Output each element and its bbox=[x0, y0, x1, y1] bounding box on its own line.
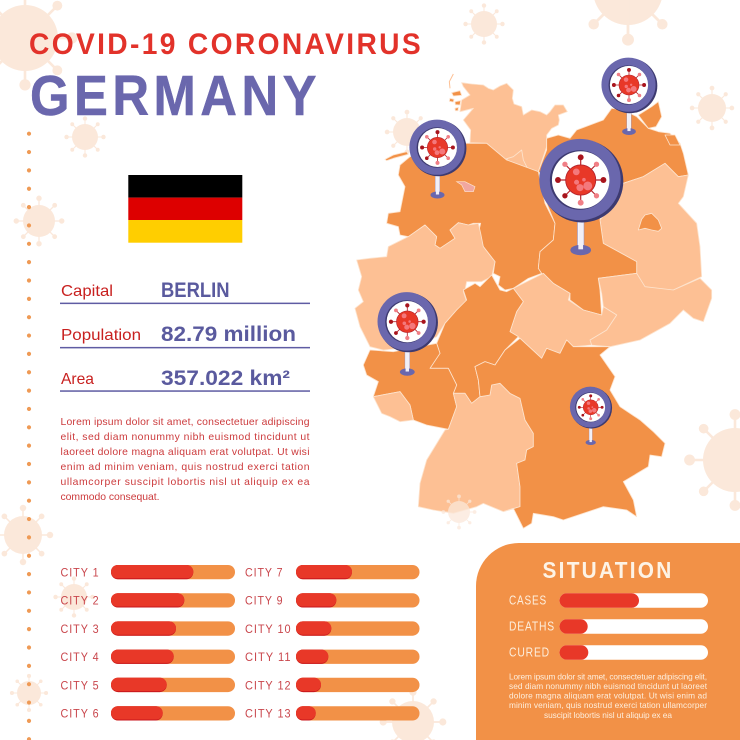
bar: City 13 bbox=[245, 706, 420, 721]
state: Schleswig-Holstein bbox=[460, 83, 567, 172]
text block: situation description: minim veniam, quis nostrud exerci tation ullamcorper bbox=[509, 700, 707, 710]
bar: City 12 bbox=[245, 678, 420, 692]
bar: City 1: CITY 1 bbox=[60, 568, 100, 580]
state: Rhineland-Palatinate bbox=[363, 343, 457, 429]
map pin: south-east bbox=[570, 387, 612, 445]
bar: City 3 bbox=[60, 621, 235, 636]
fact: capital bbox=[60, 279, 310, 304]
bar: City 12: CITY 12 bbox=[245, 680, 292, 692]
state: Brandenburg bbox=[600, 163, 702, 290]
state: Berlin bbox=[638, 213, 662, 231]
bar: City 3: CITY 3 bbox=[60, 624, 100, 636]
island outline: Sylt bbox=[449, 74, 453, 88]
bar: City 13: CITY 13 bbox=[245, 709, 292, 721]
bar: City 5: CITY 5 bbox=[60, 680, 100, 692]
state: Bremen bbox=[457, 182, 475, 192]
text block: description: Lorem ipsum dolor sit amet, consectetuer adipiscing bbox=[60, 417, 310, 428]
bar: City 2: CITY 2 bbox=[60, 596, 100, 608]
title: COVID-19 CORONAVIRUS: COVID-19 CORONAVIRUS bbox=[29, 28, 423, 61]
text block: description: ullamcorper suscipit lobortis nisl ut aliquip ex ea bbox=[60, 477, 310, 488]
islands: Ruegen and Usedom bbox=[638, 102, 680, 145]
state: Baden-Wuerttemberg bbox=[418, 383, 533, 513]
text block: description: commodo consequat. bbox=[60, 492, 160, 503]
text block: description: elit, sed diam nonummy nibh euismod tincidunt ut bbox=[60, 432, 310, 443]
state: Bavaria bbox=[475, 338, 665, 528]
bar: City 4: CITY 4 bbox=[60, 652, 100, 664]
text block: situation description: suscipit lobortis nisl ut aliquip ex ea bbox=[544, 710, 672, 720]
bar: deaths bbox=[509, 619, 708, 634]
fact: area: Area bbox=[61, 371, 94, 388]
map pin: north-east bbox=[601, 58, 657, 135]
heading: GERMANY: GERMANY bbox=[30, 64, 321, 128]
icon: German flag bbox=[128, 175, 242, 243]
state: Saxony bbox=[590, 273, 712, 347]
fact: population bbox=[60, 323, 310, 348]
heading: SITUATION: SITUATION bbox=[542, 557, 674, 583]
bar: City 4 bbox=[60, 650, 235, 664]
bar: City 11: CITY 11 bbox=[245, 652, 292, 664]
state: North Rhine-Westphalia bbox=[355, 223, 495, 350]
fact: population: 82.79 million bbox=[161, 323, 296, 346]
text block: description: laoreet dolore magna aliquam erat volutpat. Ut wisi bbox=[60, 447, 310, 458]
bar: cases: CASES bbox=[509, 594, 547, 608]
dotted vertical line bbox=[27, 134, 31, 740]
panel: situation bbox=[476, 543, 740, 740]
fact: capital: Capital bbox=[61, 283, 113, 300]
bar: cured bbox=[509, 645, 708, 660]
bar: City 5 bbox=[60, 678, 235, 692]
bar: City 10: CITY 10 bbox=[245, 624, 292, 636]
bar: cases bbox=[509, 593, 708, 608]
map pin: centre large bbox=[539, 139, 623, 255]
state: Thuringia bbox=[510, 273, 617, 358]
bar: deaths: DEATHS bbox=[509, 620, 555, 634]
background virus over map bbox=[442, 495, 476, 529]
bar: City 1 bbox=[60, 565, 235, 580]
bar: City 7 bbox=[245, 565, 420, 580]
state: Saxony-Anhalt bbox=[538, 203, 637, 315]
bar: City 7: CITY 7 bbox=[245, 568, 284, 580]
state: Mecklenburg-Vorpommern bbox=[538, 108, 688, 187]
text block: situation description bbox=[509, 671, 708, 720]
bar: City 9: CITY 9 bbox=[245, 596, 284, 608]
state: Lower Saxony bbox=[387, 143, 555, 290]
panel background bbox=[476, 543, 740, 740]
state: Saarland bbox=[373, 392, 413, 422]
map pin: north-west bbox=[409, 120, 466, 198]
text block: situation description: dolore magna aliquam erat volutpat. Ut wisi enim ad bbox=[509, 691, 707, 701]
fact: capital: BERLIN bbox=[161, 279, 230, 302]
islands: North Sea bbox=[385, 91, 462, 161]
fact: area bbox=[60, 367, 310, 392]
fact: area: 357.022 km² bbox=[161, 367, 290, 390]
bar: City 6 bbox=[60, 706, 235, 721]
text block: situation description: Lorem ipsum dolor sit amet, consectetuer adipiscing elit, bbox=[509, 671, 707, 681]
bar: City 6: CITY 6 bbox=[60, 709, 100, 721]
text block: description bbox=[60, 417, 310, 503]
bar: City 2 bbox=[60, 593, 235, 608]
bar: City 10 bbox=[245, 621, 420, 636]
text block: situation description: sed diam nonummy nibh euismod tincidunt ut laoreet bbox=[509, 681, 708, 691]
panel: country facts bbox=[60, 279, 310, 392]
state: Hamburg bbox=[507, 150, 528, 171]
chart: city bars left column bbox=[60, 565, 235, 721]
chart: city bars right column bbox=[245, 565, 420, 721]
fact: population: Population bbox=[61, 327, 141, 344]
state: Hesse bbox=[430, 275, 523, 403]
bar: City 11 bbox=[245, 650, 420, 664]
bar: cured: CURED bbox=[509, 645, 550, 659]
bar: City 9 bbox=[245, 593, 420, 608]
map: Germany states bbox=[355, 74, 712, 528]
text block: description: enim ad minim veniam, quis nostrud exerci tation bbox=[60, 462, 310, 473]
map pin: west bbox=[378, 292, 438, 376]
